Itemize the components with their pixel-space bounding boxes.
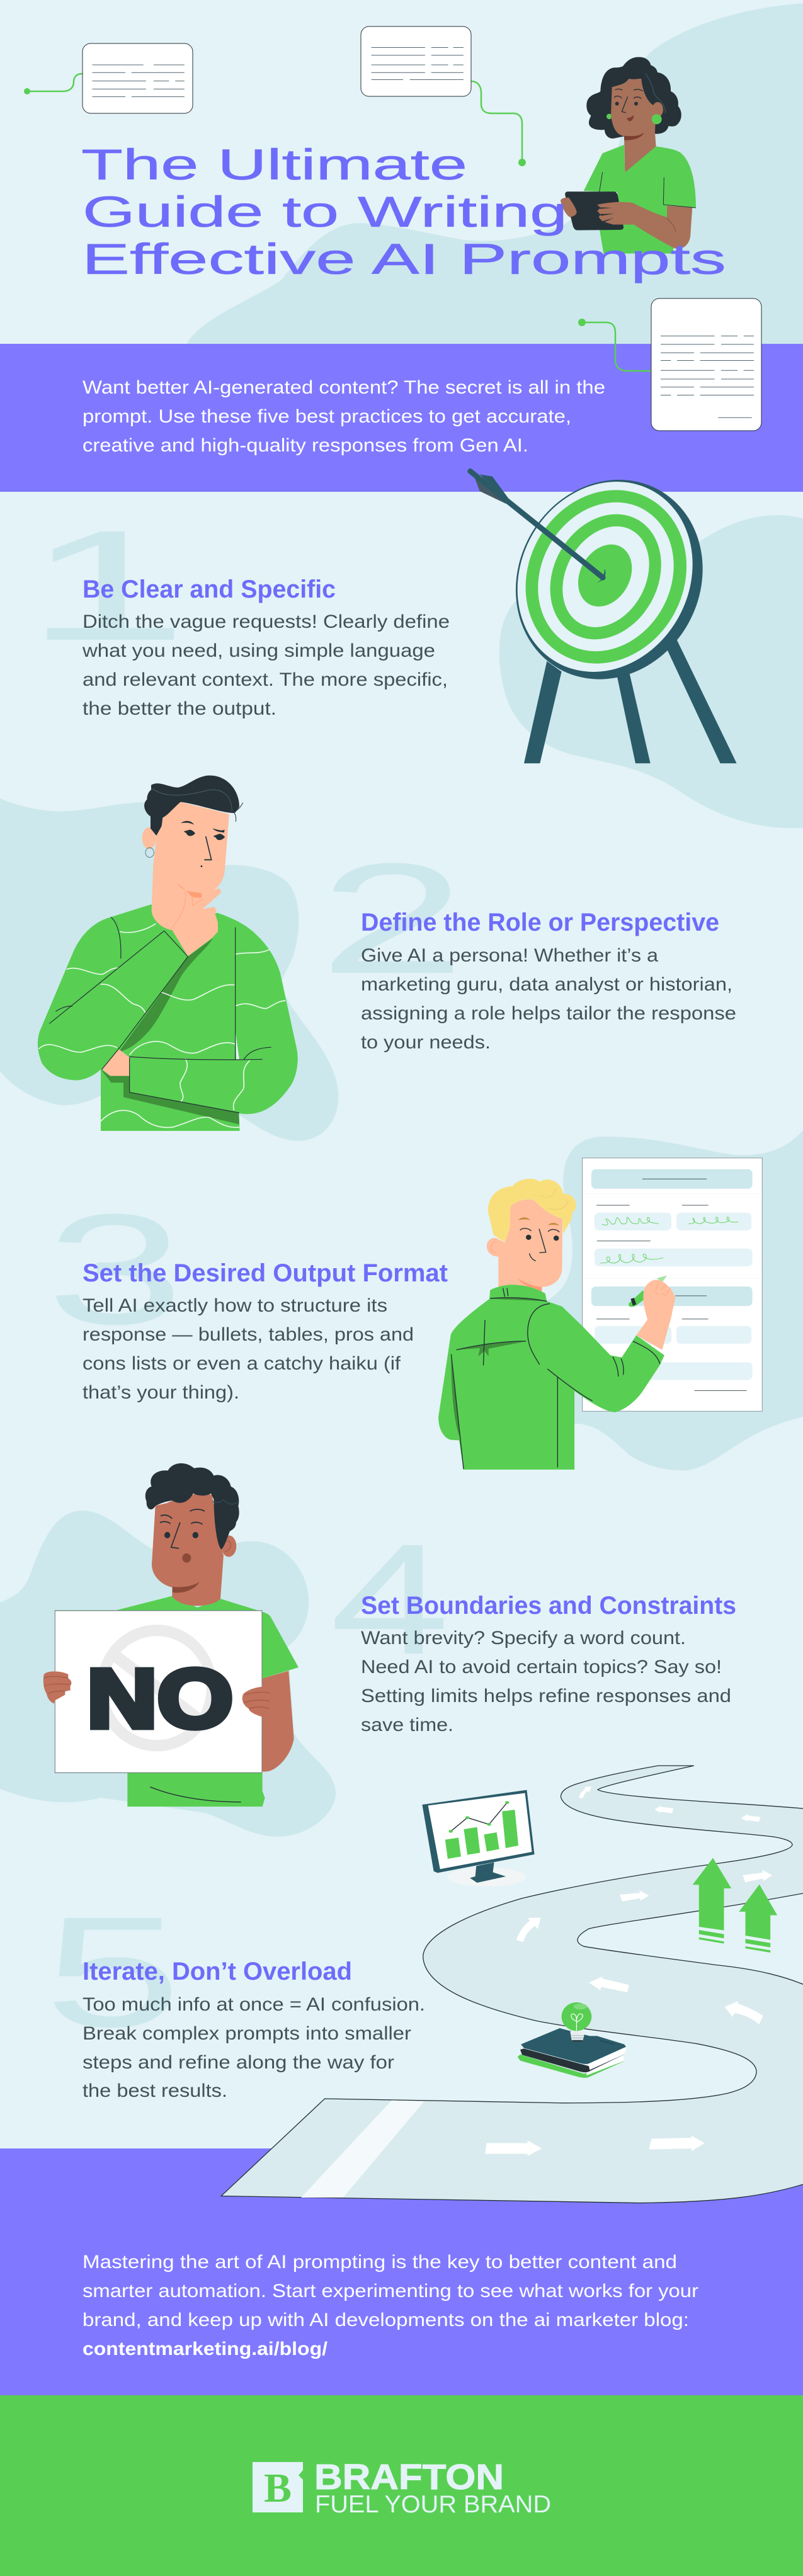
form board: [583, 1158, 762, 1411]
title: Effective AI Prompts: [82, 235, 726, 283]
background blobs: [0, 3, 803, 1837]
step 1 text: the better the output.: [83, 698, 276, 719]
intro text: prompt. Use these five best practices to get accurate,: [83, 406, 571, 427]
step 1 text: what you need, using simple language: [82, 640, 435, 661]
step 5 text: steps and refine along the way for: [83, 2052, 394, 2073]
step 2 text: to your needs.: [361, 1032, 491, 1053]
step 3 text: [83, 1295, 414, 1403]
Brafton logo: [253, 2457, 551, 2518]
closing band background: [0, 2148, 803, 2395]
closing text: smarter automation. Start experimenting to see what works for your: [83, 2281, 698, 2301]
document card 2: [361, 26, 471, 96]
step number 3: 3: [47, 1181, 184, 1357]
closing text: brand, and keep up with AI developments on the ai marketer blog:: [83, 2310, 689, 2330]
step 4 text: save time.: [361, 1715, 453, 1735]
illustration: thinking man: [38, 775, 298, 1131]
illustration: woman with tablet: [561, 57, 696, 254]
step 5 text: the best results.: [83, 2080, 227, 2101]
step 1 heading: Be Clear and Specific: [83, 576, 336, 603]
intro band background: [0, 344, 803, 492]
step 4 text: Setting limits helps refine responses and: [361, 1686, 731, 1706]
illustration: man holding NO sign: [43, 1463, 299, 1807]
step 2 text: assigning a role helps tailor the response: [361, 1003, 736, 1024]
step 5 text: Too much info at once = AI confusion.: [83, 1994, 425, 2015]
closing text: contentmarketing.ai/blog/: [83, 2339, 328, 2359]
step 1 text: Ditch the vague requests! Clearly define: [83, 611, 450, 632]
step 2 text: marketing guru, data analyst or historian,: [361, 974, 732, 995]
intro text: creative and high-quality responses from Gen AI.: [83, 435, 528, 456]
step 1 text: [82, 611, 450, 719]
step 2 text: Give AI a persona! Whether it’s a: [361, 945, 658, 966]
connector: document card 3: [578, 319, 651, 371]
title: Guide to Writing: [83, 188, 567, 236]
step 4 text: [361, 1628, 731, 1735]
sign word NO: NO: [87, 1652, 233, 1745]
step number 2: 2: [319, 831, 466, 1006]
icon: chart on monitor: [422, 1790, 535, 1887]
illustration: man writing on a form: [438, 1158, 762, 1470]
step 3 text: cons lists or even a catchy haiku (if: [83, 1353, 401, 1374]
title: The Ultimate: [81, 140, 467, 189]
connector: document card 2: [471, 81, 526, 166]
closing text: [83, 2252, 698, 2359]
brand name: BRAFTON: [314, 2457, 504, 2497]
step 2 text: [361, 945, 736, 1053]
step 1 text: and relevant context. The more specific,: [83, 669, 448, 690]
closing text: Mastering the art of AI prompting is the key to better content and: [83, 2252, 677, 2272]
footer band background: [0, 2395, 803, 2576]
step number 5: 5: [44, 1884, 181, 2060]
step 3 heading: Set the Desired Output Format: [83, 1259, 448, 1287]
step 2 heading: Define the Role or Perspective: [361, 909, 719, 936]
step 4 heading: Set Boundaries and Constraints: [361, 1592, 736, 1620]
step 3 text: Tell AI exactly how to structure its: [83, 1295, 387, 1316]
step number 1: 1: [25, 497, 188, 673]
document card 1: [83, 43, 193, 113]
connector: document card 1: [24, 74, 83, 94]
document card 3: [651, 298, 761, 431]
step 4 text: Need AI to avoid certain topics? Say so!: [361, 1657, 722, 1677]
brand tagline: FUEL YOUR BRAND: [315, 2491, 551, 2518]
step 5 text: [83, 1994, 425, 2101]
step 5 text: Break complex prompts into smaller: [83, 2023, 411, 2044]
illustration: winding road: [221, 1766, 803, 2203]
icon: target with arrow: [470, 446, 738, 763]
step 3 text: that’s your thing).: [83, 1382, 239, 1403]
title: [81, 140, 726, 283]
intro text: [83, 377, 605, 456]
step number 4: 4: [330, 1511, 450, 1687]
logo square: [253, 2462, 303, 2512]
step 4 text: Want brevity? Specify a word count.: [361, 1628, 686, 1648]
step 5 heading: Iterate, Don’t Overload: [83, 1958, 352, 1985]
logo letter B: B: [264, 2465, 292, 2511]
intro text: Want better AI-generated content? The secret is all in the: [83, 377, 605, 398]
icon: light bulb on books: [518, 2002, 626, 2078]
step 3 text: response — bullets, tables, pros and: [83, 1324, 414, 1345]
icon: rising green arrows: [693, 1858, 777, 1953]
